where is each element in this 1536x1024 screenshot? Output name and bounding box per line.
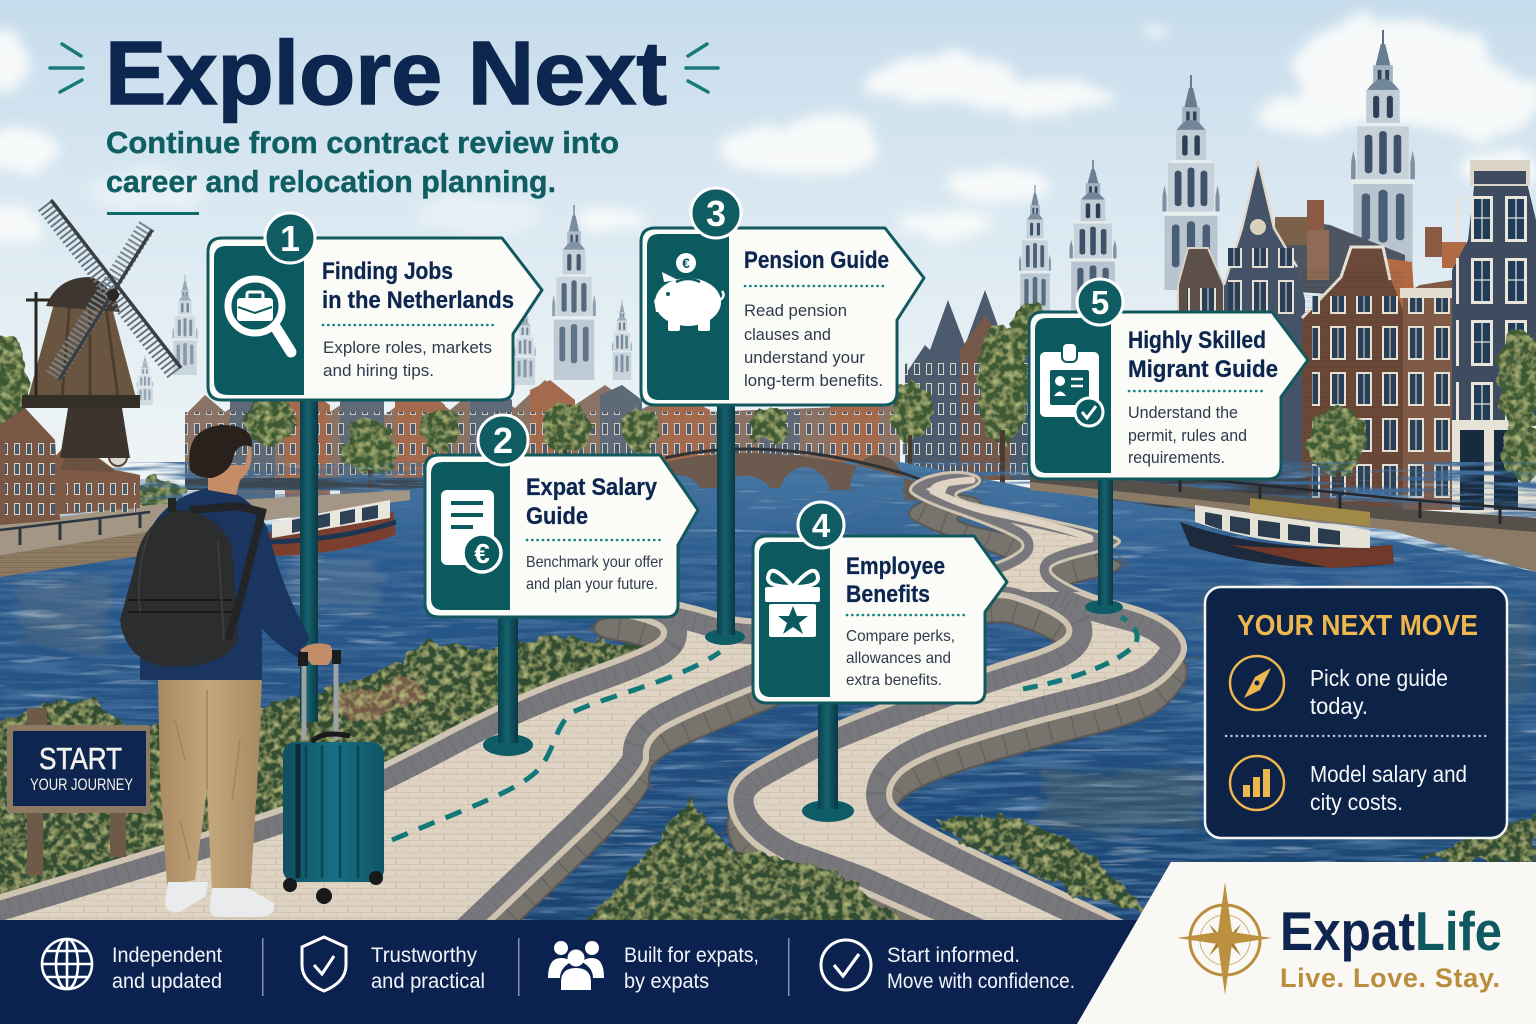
tree trunks [368, 430, 1341, 510]
description: Benchmark your offer [526, 554, 664, 571]
logo: compass mark [1177, 882, 1272, 995]
heading: Benefits [846, 581, 930, 608]
backpack [120, 498, 262, 667]
bottom bar item: built for expats: Built for expats, [624, 944, 759, 967]
walkway paving [0, 471, 1208, 960]
logo panel [1077, 862, 1536, 1024]
number 5 [1077, 279, 1123, 325]
sign 4: employee benefits [753, 502, 1007, 703]
panel: your next move [1205, 587, 1507, 838]
bottom bar item: start informed [821, 940, 1075, 993]
bottom bar item: start informed: Start informed. [887, 944, 1020, 967]
title rays left [50, 44, 83, 92]
far strand paving [933, 480, 1090, 538]
number 5: 5 [1091, 284, 1109, 321]
heading: Guide [526, 503, 588, 530]
bottom bar item: trustworthy: and practical [371, 970, 485, 993]
icon: piggy bank [654, 253, 724, 331]
walkway stone borders [0, 471, 1208, 960]
bottom bar item: independent: Independent [112, 944, 222, 967]
heading: Migrant Guide [1128, 356, 1278, 383]
number 1 [265, 213, 315, 263]
hair [189, 425, 252, 478]
sign post 1 [300, 400, 318, 722]
description: requirements. [1128, 448, 1225, 467]
sign 3: pension guide [641, 188, 924, 405]
canal water [0, 462, 1536, 925]
arched canal bridge [665, 449, 945, 500]
traveller with backpack [120, 425, 333, 917]
background trees [0, 304, 1536, 517]
description: extra benefits. [846, 672, 942, 689]
text: model salary: city costs. [1310, 789, 1403, 815]
text: model salary: Model salary and [1310, 761, 1467, 787]
heading: Expat Salary [526, 474, 658, 501]
sign post 5 [1085, 477, 1123, 614]
bottom bar item: independent: and updated [112, 970, 222, 993]
text: pick one guide: today. [1310, 693, 1368, 719]
description: Understand the [1128, 403, 1238, 422]
left dutch houses [0, 408, 140, 525]
bottom bar item: built for expats: by expats [624, 970, 709, 993]
heading: in the Netherlands [322, 287, 514, 314]
hand [300, 643, 333, 665]
description: long-term benefits. [744, 371, 883, 390]
pink flowering shrubs [330, 680, 429, 719]
sign post 2 [483, 615, 533, 756]
water reflections [20, 560, 1530, 830]
description: Read pension [744, 301, 847, 320]
description: and plan your future. [526, 576, 658, 593]
description: Explore roles, markets [323, 338, 492, 357]
sign 1: finding jobs [208, 213, 542, 400]
description: Compare perks, [846, 628, 955, 645]
far canal houses [185, 290, 1030, 500]
sky background [0, 0, 1536, 520]
bottom bar item: trustworthy [302, 937, 485, 993]
subtitle rule [107, 212, 199, 215]
icon: piggy bank: € [682, 255, 690, 271]
title: Explore Next [105, 24, 667, 124]
heading: Employee [846, 553, 945, 580]
distant towers [137, 30, 1415, 405]
sign post 4 [802, 701, 854, 822]
right canal boat [1180, 498, 1394, 568]
bottom bar item: trustworthy: Trustworthy [371, 944, 477, 967]
right quay and railing [1030, 462, 1536, 572]
foreground foliage [585, 800, 1536, 925]
bottom bar item: start informed: Move with confidence. [887, 970, 1075, 993]
start your journey sign: START [39, 741, 122, 776]
suitcase [283, 650, 384, 904]
icon: bar chart [1230, 756, 1284, 810]
text: pick one guide: Pick one guide [1310, 665, 1448, 691]
windmill [22, 200, 181, 458]
panel title: YOUR NEXT MOVE [1237, 610, 1478, 642]
icon: gift box [765, 571, 820, 637]
logo tagline: Live. Love. Stay. [1280, 963, 1500, 993]
bottom navy bar [0, 920, 1138, 1024]
left bank foliage [0, 636, 670, 905]
icon: magnifier with briefcase [228, 279, 291, 352]
right gabled canal houses [1100, 160, 1536, 518]
number 3 [691, 188, 741, 238]
heading: Highly Skilled [1128, 327, 1266, 354]
neck and face [208, 440, 252, 495]
icon: compass [1230, 656, 1284, 710]
title rays right [686, 44, 718, 92]
left canal boat [268, 500, 396, 556]
description: and hiring tips. [323, 361, 434, 380]
sign 2: expat salary guide [425, 415, 698, 617]
description: understand your [744, 348, 865, 367]
subtitle: Continue from contract review into [106, 125, 619, 160]
number 4: 4 [812, 507, 831, 544]
route dashed line lower [392, 652, 720, 840]
description: clauses and [744, 325, 831, 344]
jacket [140, 487, 310, 680]
number 2: 2 [493, 420, 513, 461]
number 4 [798, 502, 844, 548]
walkway wall [0, 495, 1208, 984]
heading: Finding Jobs [322, 258, 453, 285]
start your journey sign [7, 708, 150, 875]
icon: document with euro [441, 490, 501, 572]
bottom bar item: built for expats [548, 941, 759, 993]
number 1: 1 [280, 218, 300, 259]
sign post 3 [705, 403, 745, 645]
trainers [165, 882, 274, 917]
bottom bar item: independent [42, 939, 222, 993]
sign 5: highly skilled migrant guide [1029, 279, 1308, 479]
number 3: 3 [706, 193, 726, 234]
wall block joints [0, 483, 1208, 972]
start your journey sign: YOUR JOURNEY [30, 775, 133, 794]
logo wordmark: ExpatLife [1280, 900, 1502, 962]
winding stone walkway [0, 470, 1199, 920]
trousers [158, 678, 262, 895]
clouds [0, 13, 1536, 241]
icon: permit badge [1040, 343, 1103, 426]
description: allowances and [846, 650, 951, 667]
subtitle: career and relocation planning. [106, 164, 556, 199]
left quay and railing [0, 490, 410, 577]
route dashed line upper [1023, 617, 1137, 689]
icon: document with euro: € [474, 538, 490, 569]
heading: Pension Guide [744, 247, 889, 274]
number 2 [478, 415, 528, 465]
description: permit, rules and [1128, 426, 1247, 445]
